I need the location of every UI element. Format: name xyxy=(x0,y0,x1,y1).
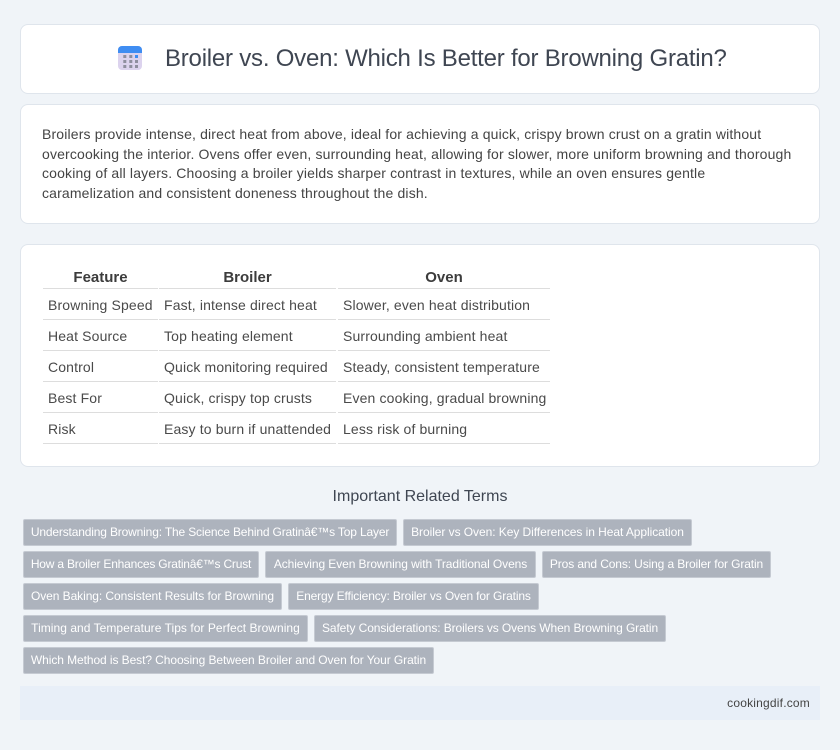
panel: comparison table xyxy=(20,244,820,467)
row: heat source: Heat Source xyxy=(48,328,127,344)
text block: intro: cooking of all layers. Choosing a broiler yields sharper contrast in textures, while an oven ensures gentle xyxy=(42,165,705,181)
text block: intro: overcooking the interior. Ovens offer even, surrounding heat, allowing for slower, more uniform browning and thorough xyxy=(42,146,791,162)
row: browning speed: Browning Speed xyxy=(48,297,153,313)
heading: Broiler vs. Oven: Which Is Better for Browning Gratin? xyxy=(165,45,727,72)
related term tags: Which Method is Best? Choosing Between Broiler and Oven for Your Gratin xyxy=(31,653,426,667)
footer xyxy=(20,686,820,720)
row: best for: Best For xyxy=(48,390,102,406)
related term tags: Understanding Browning: The Science Behind Gratinâ€™s Top Layer xyxy=(31,525,389,539)
related term tags xyxy=(23,519,771,674)
panel: comparison table: Fast, intense direct heat xyxy=(164,297,317,313)
related term tags: Energy Efficiency: Broiler vs Oven for Gratins xyxy=(296,589,531,603)
panel: comparison table: Even cooking, gradual browning xyxy=(343,390,546,406)
panel: comparison table: Quick monitoring required xyxy=(164,359,328,375)
panel: comparison table: Quick, crispy top crusts xyxy=(164,390,312,406)
text block: intro: caramelization and consistent doneness throughout the dish. xyxy=(42,185,428,201)
text block: intro: Broilers provide intense, direct heat from above, ideal for achieving a quick, crispy brown crust on a gratin without xyxy=(42,126,761,142)
panel: comparison table: Steady, consistent temperature xyxy=(343,359,540,375)
related term tags: Timing and Temperature Tips for Perfect Browning xyxy=(31,621,300,635)
related term tags: Pros and Cons: Using a Broiler for Gratin xyxy=(550,557,763,571)
footer source: cookingdif.com xyxy=(727,696,810,710)
panel: comparison table: Top heating element xyxy=(164,328,293,344)
title card xyxy=(20,24,820,94)
related term tags: Safety Considerations: Broilers vs Ovens When Browning Gratin xyxy=(322,621,658,635)
panel: comparison table: Less risk of burning xyxy=(343,421,467,437)
related term tags: Broiler vs Oven: Key Differences in Heat Application xyxy=(411,525,684,539)
panel: comparison table: Easy to burn if unattended xyxy=(164,421,331,437)
panel: intro text xyxy=(20,104,820,224)
related term tags: How a Broiler Enhances Gratinâ€™s Crust xyxy=(31,557,251,571)
table header: Feature xyxy=(73,269,128,286)
row: control: Control xyxy=(48,359,94,375)
related term tags: Oven Baking: Consistent Results for Browning xyxy=(31,589,274,603)
panel: comparison table: Slower, even heat distribution xyxy=(343,297,530,313)
icon: calendar xyxy=(118,46,142,70)
text block: intro xyxy=(42,126,791,201)
row: risk: Risk xyxy=(48,421,76,437)
related term tags: Achieving Even Browning with Traditional Ovens xyxy=(274,557,527,571)
panel: comparison table: Surrounding ambient heat xyxy=(343,328,507,344)
heading: related terms: Important Related Terms xyxy=(333,488,507,505)
panel: comparison table: Broiler xyxy=(223,269,272,286)
panel: comparison table: Oven xyxy=(425,269,463,286)
